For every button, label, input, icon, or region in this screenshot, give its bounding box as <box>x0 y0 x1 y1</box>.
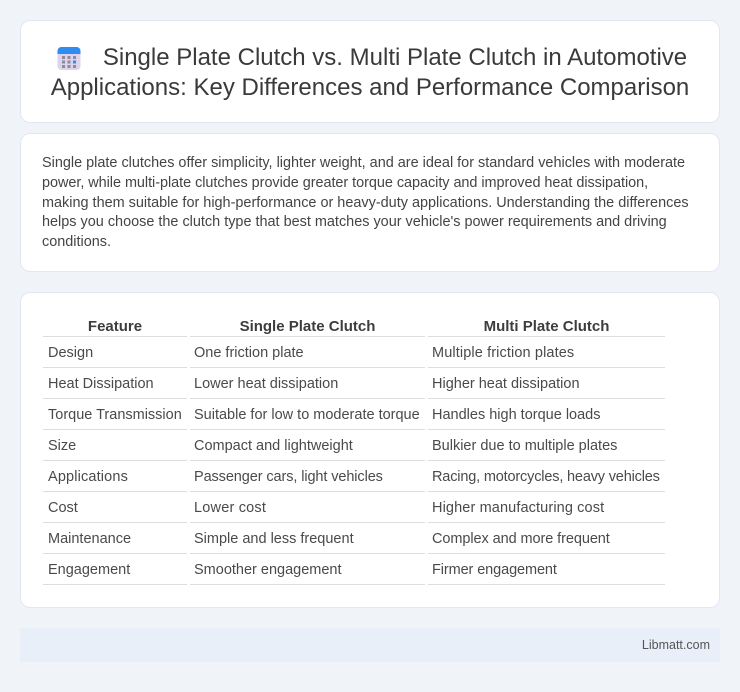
summary text: power, while multi-plate clutches provide greater torque capacity and improved heat dissipation, <box>42 175 648 191</box>
row: Design: Design <box>48 345 93 361</box>
row: Heat Dissipation: Higher heat dissipation <box>432 376 580 392</box>
row: Maintenance: Simple and less frequent <box>194 531 354 547</box>
row: Maintenance: Complex and more frequent <box>432 531 610 547</box>
row: Torque Transmission: Suitable for low to moderate torque <box>194 407 420 423</box>
summary text: conditions. <box>42 234 111 250</box>
row: Applications: Racing, motorcycles, heavy vehicles <box>432 469 660 485</box>
row: Size: Compact and lightweight <box>194 438 353 454</box>
row: Design: One friction plate <box>194 345 304 361</box>
row: Engagement <box>43 562 665 585</box>
table header: Multi Plate Clutch <box>484 318 609 335</box>
title: Applications: Key Differences and Performance Comparison <box>51 74 689 101</box>
footer bar <box>20 628 720 662</box>
table header: Feature <box>88 318 142 335</box>
title <box>50 44 689 101</box>
row: Cost: Lower cost <box>194 500 266 516</box>
row: Heat Dissipation: Heat Dissipation <box>48 376 154 392</box>
row: Torque Transmission <box>43 407 665 430</box>
row: Size: Bulkier due to multiple plates <box>432 438 617 454</box>
row: Applications: Applications <box>48 469 128 485</box>
summary text: helps you choose the clutch type that best matches your vehicle's power requirements and driving <box>42 214 667 230</box>
row: Engagement: Engagement <box>48 562 130 578</box>
summary text <box>42 155 689 250</box>
row: Applications <box>43 469 665 492</box>
row: Design: Multiple friction plates <box>432 345 574 361</box>
row: Design <box>43 345 665 368</box>
summary text: Single plate clutches offer simplicity, lighter weight, and are ideal for standard vehicles with moderate <box>42 155 685 171</box>
row: Maintenance: Maintenance <box>48 531 131 547</box>
row: Torque Transmission: Handles high torque loads <box>432 407 600 423</box>
row: Applications: Passenger cars, light vehicles <box>194 469 383 485</box>
panel: comparison table <box>20 292 720 608</box>
row: Size <box>43 438 665 461</box>
footer text: Libmatt.com: Libmatt.com <box>642 638 710 652</box>
row: Heat Dissipation <box>43 376 665 399</box>
panel: title card <box>20 20 720 123</box>
panel: summary <box>20 133 720 272</box>
row: Maintenance <box>43 531 665 554</box>
row: Cost: Higher manufacturing cost <box>432 500 604 516</box>
row: Engagement: Firmer engagement <box>432 562 557 578</box>
row: Engagement: Smoother engagement <box>194 562 342 578</box>
row: Heat Dissipation: Lower heat dissipation <box>194 376 338 392</box>
row: Size: Size <box>48 438 76 454</box>
row: Torque Transmission: Torque Transmission <box>48 407 182 423</box>
icon: calendar grid <box>58 47 80 70</box>
title: Single Plate Clutch vs. Multi Plate Clutch in Automotive <box>103 44 687 71</box>
summary text: making them suitable for high-performance or heavy-duty applications. Understanding the differences <box>42 194 689 210</box>
table header: Single Plate Clutch <box>240 318 375 335</box>
row: Cost: Cost <box>48 500 78 516</box>
row: Cost <box>43 500 665 523</box>
table header <box>43 318 665 337</box>
